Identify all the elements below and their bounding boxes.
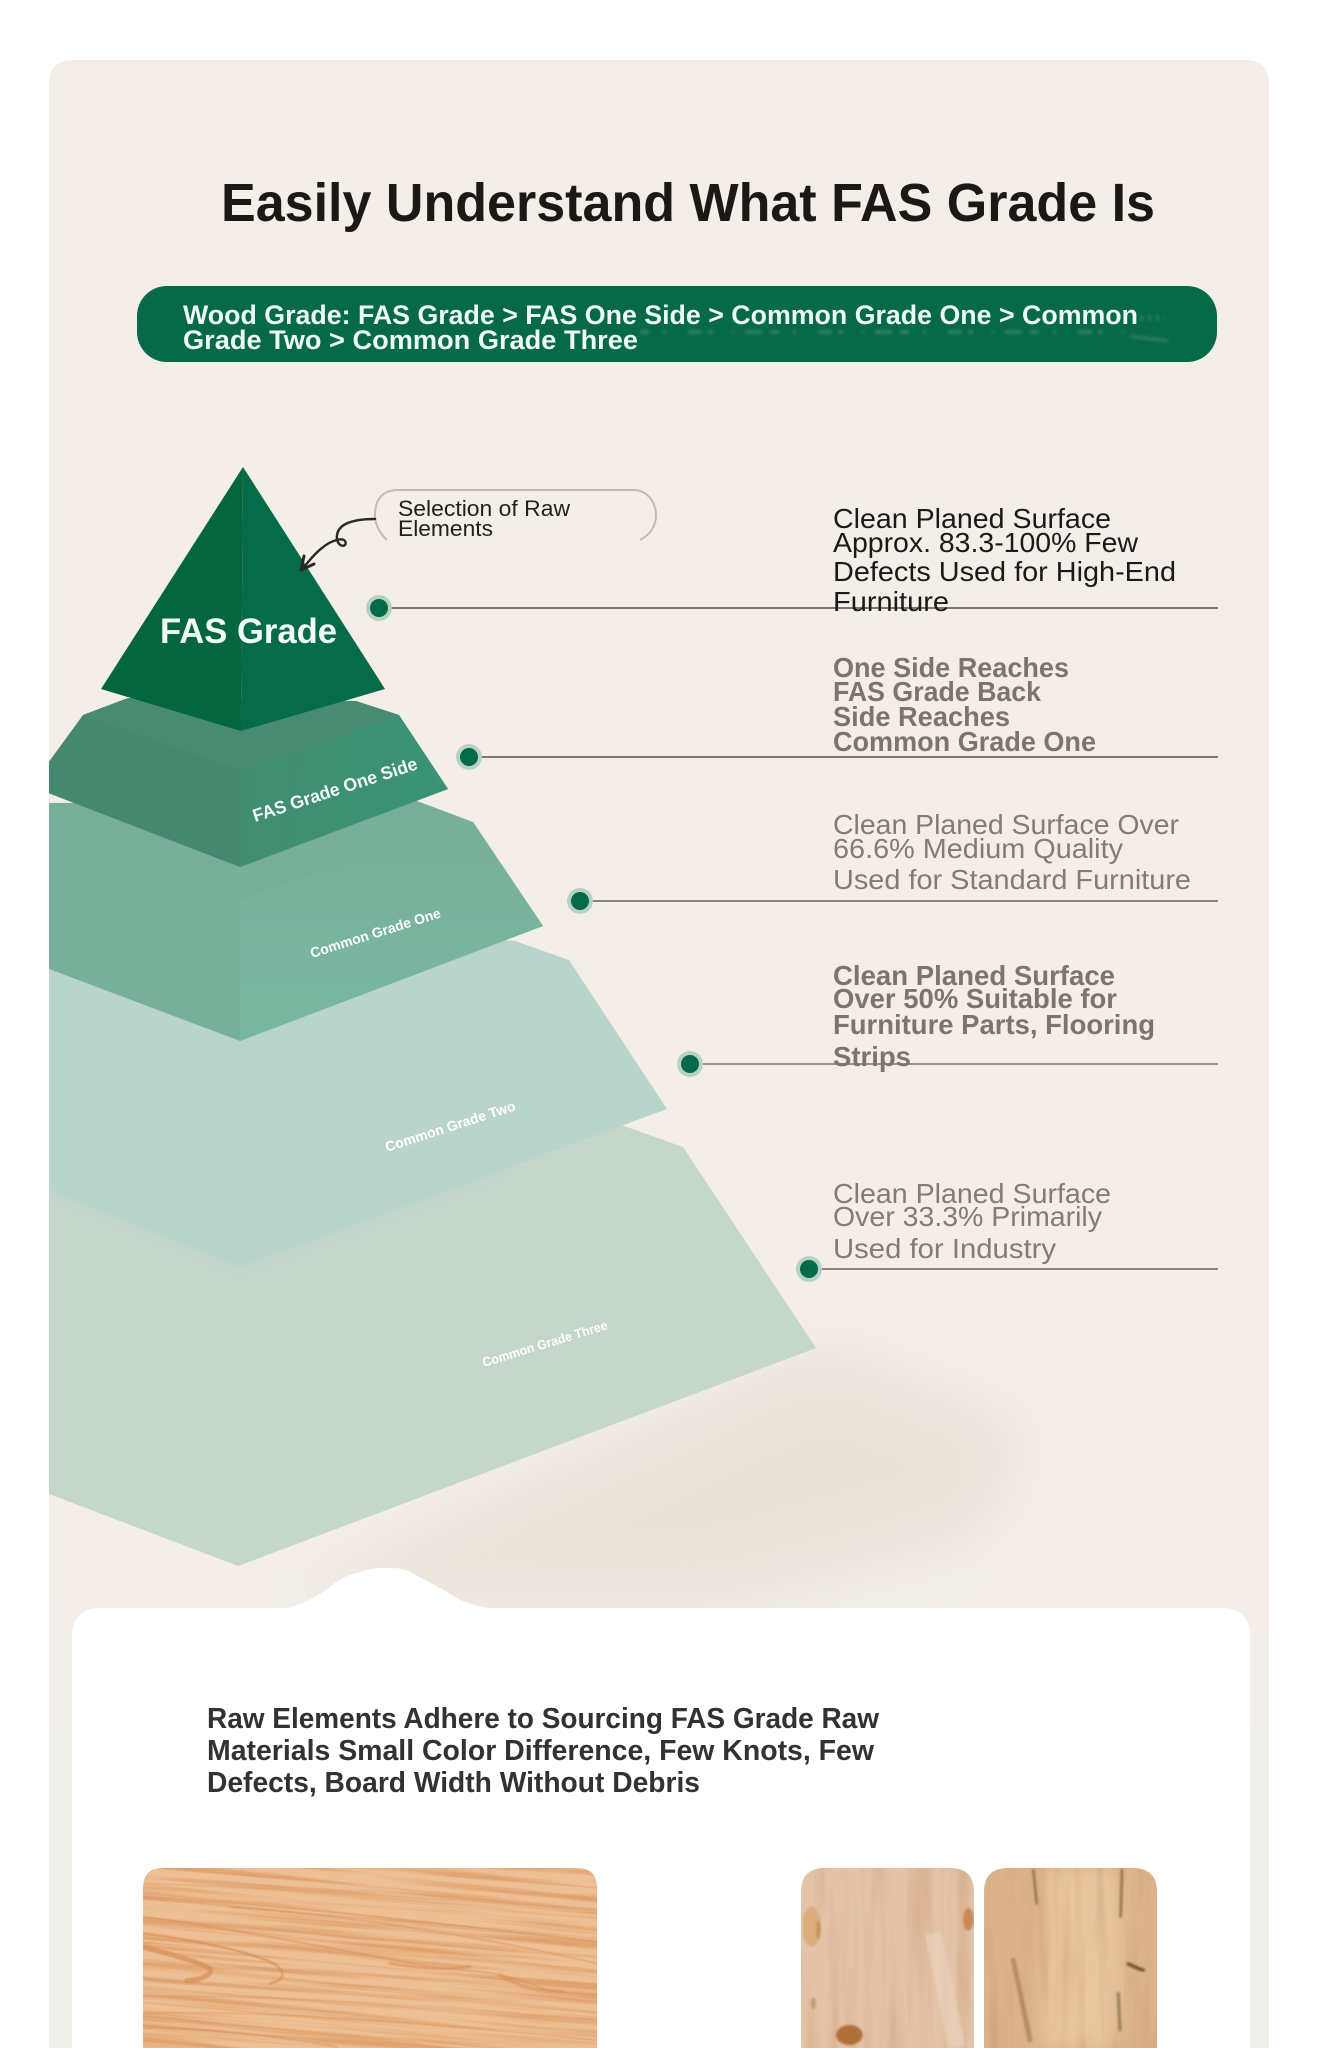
description: Common Grade Two: Clean Planed Surface — [833, 960, 1115, 991]
description: Common Grade Three: Used for Industry — [833, 1233, 1056, 1264]
photo: oak wood grain — [143, 1868, 597, 2048]
description: FAS Grade One Side: One Side Reaches — [833, 652, 1069, 683]
title: Easily Understand What FAS Grade Is — [221, 173, 1155, 233]
description: Common Grade Three: Clean Planed Surface — [833, 1178, 1111, 1209]
tier: Common Grade One: Common Grade One — [308, 905, 443, 961]
photo: pale plank — [801, 1868, 974, 2048]
leader line 2 — [456, 744, 1218, 770]
pyramid — [0, 467, 1020, 1600]
description: FAS Grade One Side — [833, 652, 1096, 757]
arrow: callout to FAS Grade — [301, 519, 375, 570]
tier: FAS Grade: FAS Grade — [160, 612, 337, 651]
tier: Common Grade Two: Common Grade Two — [383, 1098, 517, 1155]
tier: Common Grade Three — [49, 1126, 816, 1566]
description: Common Grade Two: Strips — [833, 1041, 911, 1072]
description: FAS Grade — [833, 503, 1176, 617]
tier: Common Grade Three: Common Grade Three — [480, 1318, 609, 1370]
description: Common Grade Three: Over 33.3% Primarily — [833, 1201, 1102, 1232]
leader line 1 — [366, 595, 1218, 621]
description: FAS Grade One Side: Common Grade One — [833, 726, 1096, 757]
callout: selection of raw elements — [375, 490, 656, 541]
card heading — [207, 1703, 879, 1799]
description: Common Grade Three — [833, 1178, 1111, 1264]
banner: wood grade order — [137, 286, 1217, 362]
photo: knotty plank — [984, 1868, 1157, 2048]
card heading: Raw Elements Adhere to Sourcing FAS Grade Raw — [207, 1703, 879, 1735]
leader line 4 — [677, 1051, 1218, 1077]
panel: white card — [72, 1568, 1250, 2048]
description: Common Grade One: Used for Standard Furniture — [833, 864, 1191, 895]
callout: selection of raw elements: Elements — [398, 516, 493, 541]
description: Common Grade One — [833, 809, 1191, 895]
description: FAS Grade: Clean Planed Surface — [833, 503, 1111, 534]
pyramid shadow — [382, 1361, 1002, 1600]
banner: wood grade order: Wood Grade: FAS Grade > FAS One Side > Common Grade One > Common — [183, 300, 1138, 330]
description: FAS Grade One Side: Side Reaches — [833, 701, 1010, 732]
banner: wood grade order: Grade Two > Common Grade Three — [183, 325, 638, 355]
description: FAS Grade One Side: FAS Grade Back — [833, 676, 1041, 707]
tier: FAS Grade One Side — [48, 698, 448, 867]
tier: Common Grade One — [49, 801, 543, 1041]
tier: FAS Grade — [101, 467, 385, 731]
card heading: Materials Small Color Difference, Few Knots, Few — [207, 1735, 874, 1767]
description: Common Grade Two — [833, 960, 1155, 1072]
description: FAS Grade: Defects Used for High-End — [833, 556, 1176, 587]
card heading: Defects, Board Width Without Debris — [207, 1767, 700, 1799]
leader line 3 — [567, 888, 1218, 914]
description: FAS Grade: Approx. 83.3-100% Few — [833, 527, 1139, 558]
description: Common Grade One: 66.6% Medium Quality — [833, 833, 1123, 864]
callout: selection of raw elements: Selection of Raw — [398, 496, 570, 521]
tier: FAS Grade One Side: FAS Grade One Side — [250, 754, 420, 826]
description: FAS Grade: Furniture — [833, 586, 949, 617]
description: Common Grade One: Clean Planed Surface Over — [833, 809, 1179, 840]
leader line 5 — [796, 1256, 1218, 1282]
description: Common Grade Two: Over 50% Suitable for — [833, 983, 1117, 1014]
description: Common Grade Two: Furniture Parts, Flooring — [833, 1009, 1155, 1040]
tier: Common Grade Two — [49, 940, 667, 1266]
